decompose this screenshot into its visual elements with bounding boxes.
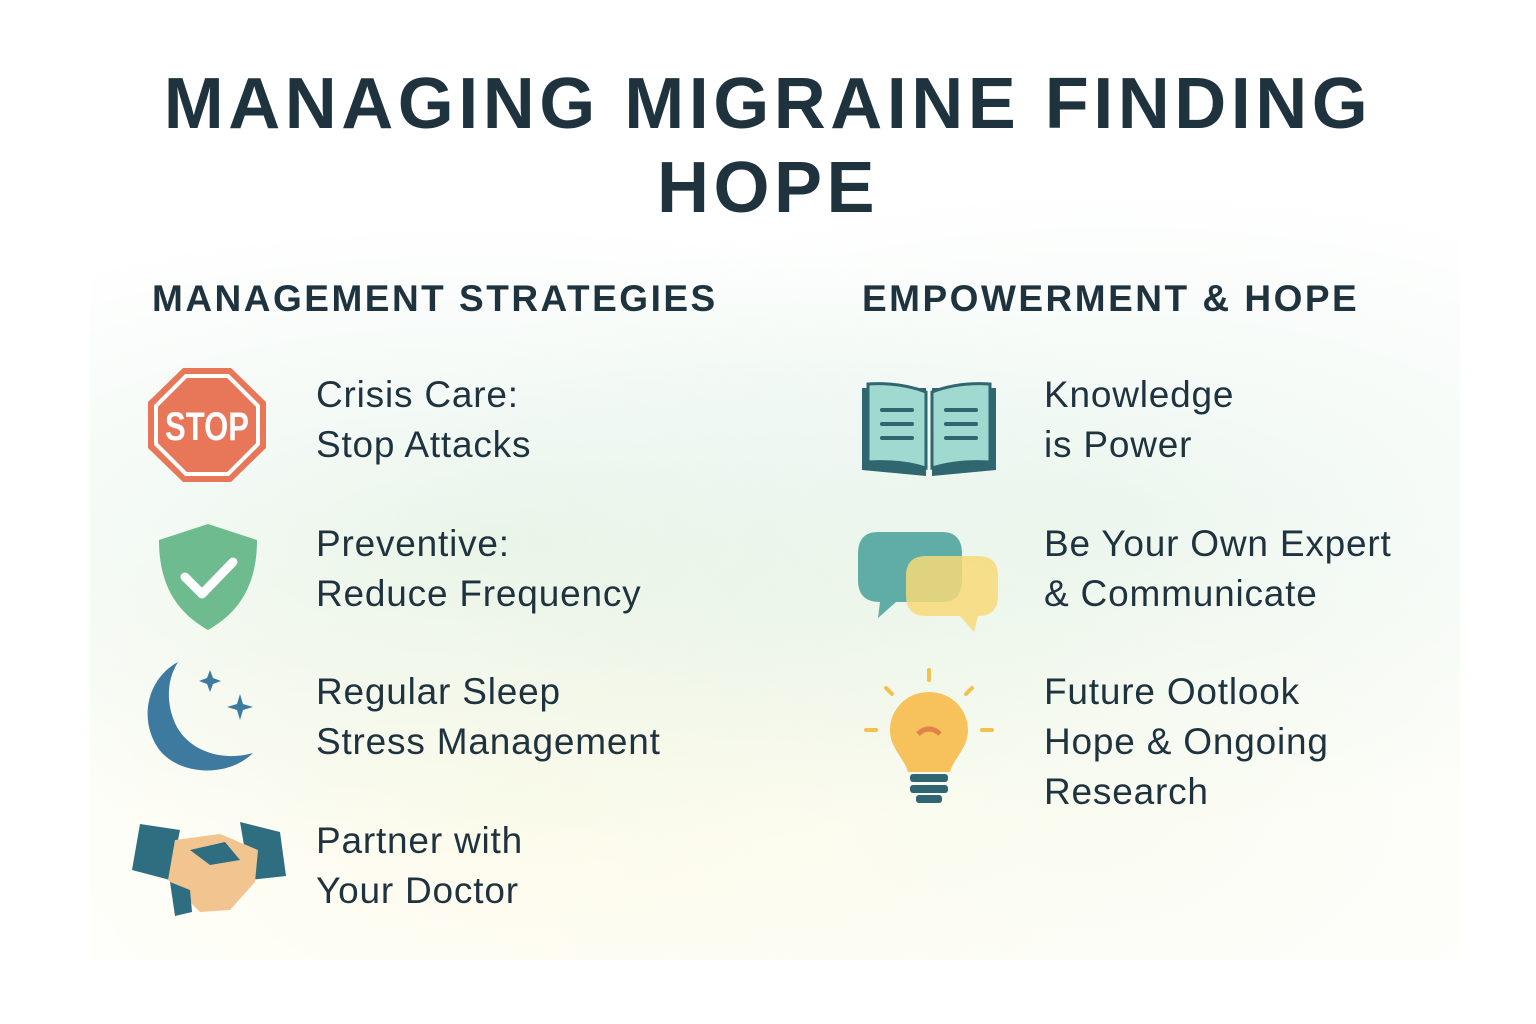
icon: stop sign — [148, 368, 266, 482]
icon: book — [862, 382, 996, 476]
icon: lightbulb — [864, 668, 994, 803]
title: HOPE — [657, 148, 879, 228]
item: knowledge: is Power — [1044, 424, 1192, 465]
item: future — [1044, 671, 1329, 812]
item: preventive: Preventive: — [316, 523, 510, 564]
item: sleep: Regular Sleep — [316, 671, 561, 712]
item: crisis care: Stop Attacks — [316, 424, 531, 465]
title — [164, 64, 1372, 228]
title: MANAGING MIGRAINE FINDING — [164, 64, 1372, 144]
item: expert: Be Your Own Expert — [1044, 523, 1392, 564]
item: knowledge — [1044, 374, 1234, 465]
item: future: Future Ootlook — [1044, 671, 1300, 712]
item: knowledge: Knowledge — [1044, 374, 1234, 415]
icon: speech bubbles — [858, 532, 998, 632]
item: future: Research — [1044, 771, 1209, 812]
icon: moon — [148, 662, 253, 770]
heading: empowerment & hope: EMPOWERMENT & HOPE — [862, 278, 1359, 319]
item: crisis care: Crisis Care: — [316, 374, 519, 415]
item: future: Hope & Ongoing — [1044, 721, 1329, 762]
heading: management strategies: MANAGEMENT STRATEGIES — [152, 278, 718, 319]
item: expert — [1044, 523, 1392, 614]
icon: shield — [159, 524, 257, 630]
item: partner: Your Doctor — [316, 870, 519, 911]
item: preventive: Reduce Frequency — [316, 573, 641, 614]
item: sleep: Stress Management — [316, 721, 661, 762]
background wash — [90, 200, 1460, 960]
item: crisis care — [316, 374, 531, 465]
icon: handshake — [132, 822, 286, 916]
item: preventive — [316, 523, 641, 614]
item: expert: & Communicate — [1044, 573, 1318, 614]
item: partner: Partner with — [316, 820, 523, 861]
item: partner — [316, 820, 523, 911]
item: sleep — [316, 671, 661, 762]
